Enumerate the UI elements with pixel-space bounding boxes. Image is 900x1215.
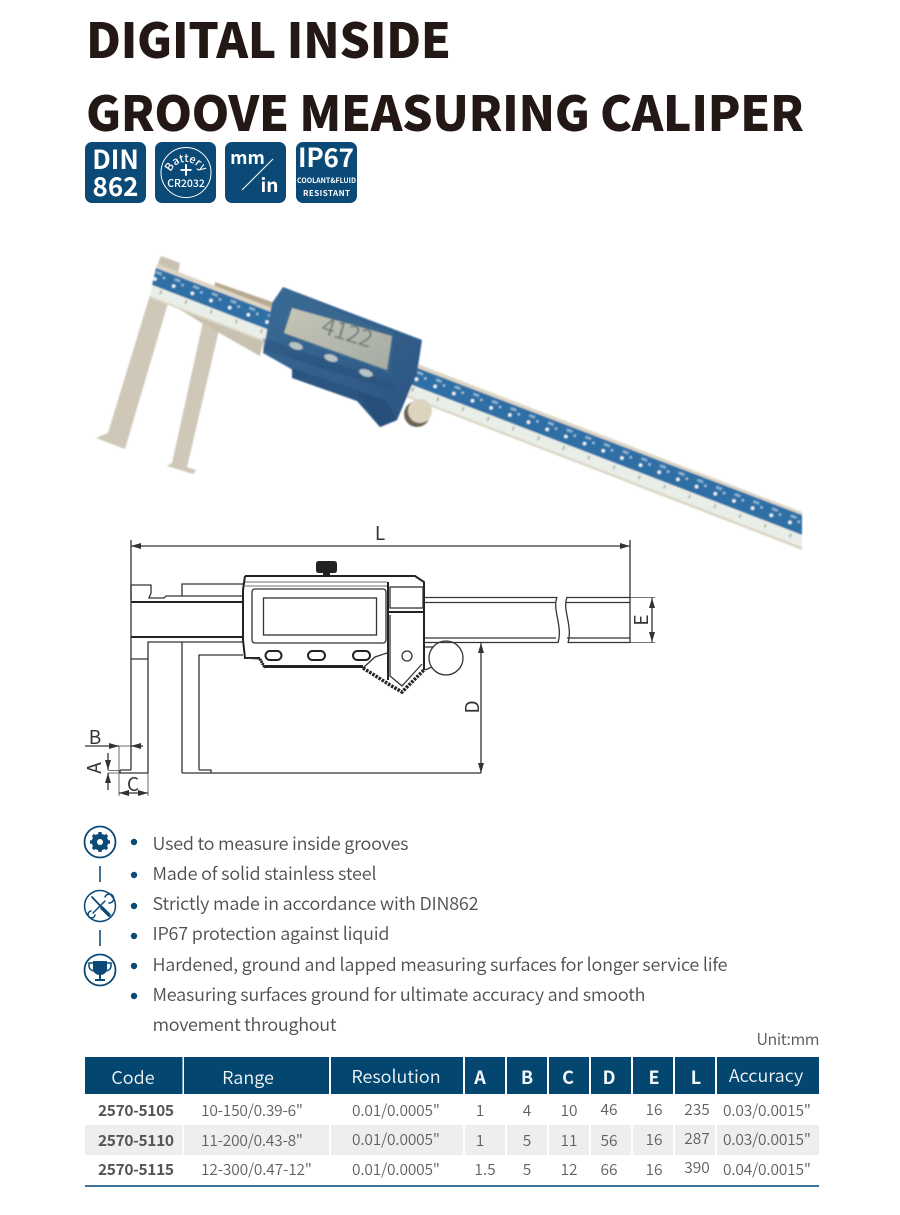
row 2570-5115: [98, 1156, 811, 1180]
row 2570-5105: 0.01/0.0005": [352, 1099, 440, 1121]
feature badges: [85, 138, 357, 204]
table header: E: [648, 1064, 660, 1090]
icon column: [84, 826, 116, 986]
icon: gear: [84, 826, 116, 858]
specification table: [85, 1057, 819, 1186]
row 2570-5110: 5: [523, 1129, 531, 1151]
badge: battery CR2032: CR2032: [167, 176, 205, 191]
feature list: Used to measure inside grooves: [152, 830, 408, 856]
row 2570-5110: 56: [600, 1129, 618, 1151]
row 2570-5110: [98, 1127, 811, 1151]
dimension D: D: [458, 700, 485, 714]
row 2570-5110: 287: [684, 1127, 710, 1149]
badge: battery CR2032: +: [180, 153, 192, 185]
row 2570-5105: 0.03/0.0015": [723, 1099, 811, 1121]
lower housing: [292, 368, 397, 427]
row 2570-5105: [98, 1098, 811, 1121]
table header: Range: [222, 1064, 274, 1090]
dimension E: [627, 598, 655, 642]
row 2570-5105: 2570-5105: [98, 1099, 174, 1121]
title: GROOVE MEASURING CALIPER: [86, 75, 804, 145]
badge: DIN 862: [85, 140, 146, 204]
row 2570-5115: 12: [560, 1158, 578, 1180]
row 2570-5115: 12-300/0.47-12": [201, 1158, 312, 1180]
row 2570-5105: 10: [560, 1099, 578, 1121]
feature list: movement throughout: [152, 1011, 337, 1037]
dimension A: [80, 753, 120, 790]
row 2570-5105: 4: [523, 1099, 531, 1121]
technical drawing: [80, 519, 655, 797]
feature list: [131, 830, 728, 1037]
knurled grip: [357, 392, 397, 427]
badge: mm / in: mm: [230, 144, 265, 170]
unit note: Unit:mm: [756, 1026, 820, 1050]
badge: mm / in: [225, 142, 286, 203]
table header: A: [473, 1064, 486, 1090]
table header: Resolution: [351, 1063, 441, 1089]
badge: IP67: IP67: [298, 138, 354, 175]
beam top tab: [156, 256, 180, 274]
row shading: [85, 1125, 819, 1155]
row 2570-5115: 0.01/0.0005": [352, 1158, 440, 1180]
housing buttons: [288, 341, 374, 378]
feature list: Hardened, ground and lapped measuring surfaces for longer service life: [152, 951, 728, 977]
wrench: [88, 894, 114, 918]
badge: IP67: RESISTANT: [303, 188, 350, 199]
table header: Code: [111, 1064, 155, 1090]
bullets: [131, 839, 137, 999]
slider rail: [214, 282, 272, 312]
table header: L: [691, 1064, 701, 1090]
feature list: IP67 protection against liquid: [152, 920, 390, 946]
row 2570-5110: 2570-5110: [98, 1129, 174, 1151]
row 2570-5110: 1: [476, 1129, 484, 1151]
feature list: Measuring surfaces ground for ultimate accuracy and smooth: [152, 981, 646, 1007]
table header: C: [562, 1064, 574, 1090]
dimension B: B: [89, 723, 101, 750]
row 2570-5110: 0.01/0.0005": [352, 1128, 440, 1150]
row 2570-5105: 1: [476, 1099, 484, 1121]
beam right section: [425, 597, 630, 643]
left jaws and beam: [120, 584, 481, 773]
feature list: Strictly made in accordance with DIN862: [152, 890, 478, 916]
LCD screen: [280, 292, 394, 374]
inside jaw: [167, 322, 219, 474]
badge: IP67: COOLANT&FLUID: [297, 176, 356, 186]
table header: Accuracy: [729, 1062, 803, 1088]
row 2570-5115: 1.5: [474, 1158, 496, 1180]
bottom bar: [265, 665, 363, 668]
icon: tools: [84, 890, 116, 922]
icon: trophy: [84, 954, 116, 986]
table header: B: [521, 1064, 533, 1090]
badge: battery CR2032: [155, 142, 216, 203]
row 2570-5105: 10-150/0.39-6": [201, 1099, 303, 1121]
dimension C: [119, 746, 148, 797]
row 2570-5105: 235: [684, 1098, 710, 1120]
row 2570-5115: 5: [523, 1158, 531, 1180]
row 2570-5115: 2570-5115: [98, 1158, 174, 1180]
screwdriver: [92, 897, 108, 914]
badge: mm / in: in: [261, 171, 278, 198]
row 2570-5105: 46: [600, 1098, 618, 1120]
row 2570-5115: 16: [645, 1158, 663, 1180]
dimension B: [85, 723, 143, 750]
row 2570-5105: 16: [645, 1098, 663, 1120]
table header: D: [603, 1064, 615, 1090]
row 2570-5110: 11: [560, 1129, 578, 1151]
feature list: Made of solid stainless steel: [152, 860, 376, 886]
row 2570-5115: 0.04/0.0015": [723, 1158, 811, 1180]
LCD screen: 4122: [318, 306, 378, 355]
row 2570-5115: 66: [600, 1158, 618, 1180]
dimension D: [458, 643, 485, 773]
badge: DIN 862: 862: [92, 167, 139, 204]
dimension L: L: [375, 519, 385, 546]
display block: [390, 587, 423, 608]
badge: DIN 862: DIN: [92, 140, 139, 177]
badge: battery CR2032: Battery: [164, 154, 206, 172]
title: DIGITAL INSIDE: [86, 2, 451, 72]
table header: [85, 1057, 819, 1094]
dimension C: C: [127, 770, 139, 797]
outside jaw: [96, 295, 168, 449]
title: [86, 2, 804, 145]
display housing: [263, 287, 422, 427]
dimension A: A: [80, 762, 107, 774]
dimension E: E: [627, 614, 654, 626]
caliper body: [243, 561, 463, 692]
product photo: digital caliper: [96, 256, 802, 550]
row 2570-5110: 0.03/0.0015": [723, 1128, 811, 1150]
thumb wheel: [404, 399, 432, 427]
row 2570-5110: 11-200/0.43-8": [201, 1129, 303, 1151]
badge: IP67: [296, 138, 357, 203]
row 2570-5115: 390: [684, 1156, 710, 1178]
ruler beam: [150, 264, 802, 550]
row 2570-5110: 16: [645, 1128, 663, 1150]
knurled edge: [363, 668, 424, 692]
